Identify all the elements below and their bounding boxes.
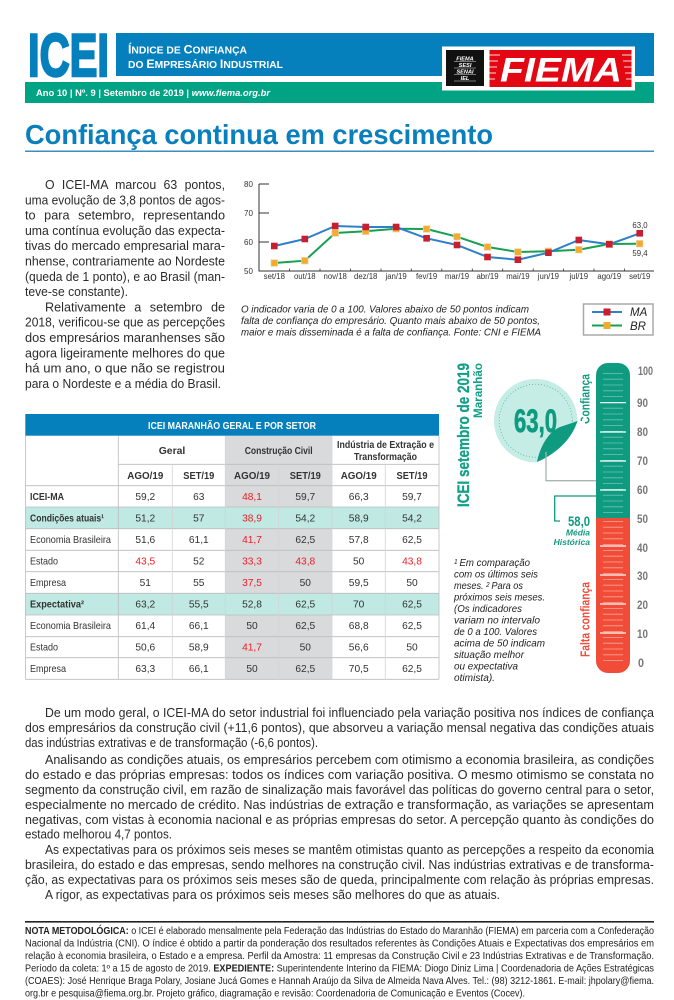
footnote beside gauge: com os últimos seis <box>454 570 538 580</box>
label: Falta confiança: Falta confiança <box>578 581 592 657</box>
methodological note: Período da coleta: 1º a 15 de agosto de 2019. EXPEDIENTE: Superintendente Interino da FIEMA: Diogo Diniz Lima | Coordenadoria de Ações Estratégicas <box>25 964 654 974</box>
period headers: SET/19 <box>183 471 214 482</box>
row: Expectativa: 70 <box>353 600 365 610</box>
row: Empresa: Empresa <box>30 578 66 589</box>
publication name: ÍNDICE DE CONFIANÇA <box>128 42 247 56</box>
end value labels: 63,0 <box>632 221 648 230</box>
row: Estado: 43,5 <box>135 556 156 568</box>
row: Estado (expectativa): 50 <box>406 642 418 654</box>
BR series <box>271 225 643 266</box>
chart caption <box>241 304 541 338</box>
period headers <box>127 471 428 482</box>
axes <box>259 184 654 271</box>
period headers: SET/19 <box>396 471 428 482</box>
MA series <box>271 223 643 263</box>
x axis labels: mai/19 <box>506 272 530 281</box>
row: Empresa (expectativa) <box>30 664 422 675</box>
row: ICEI-MA: 66,3 <box>349 492 369 503</box>
row: Economia Brasileira: 62,5 <box>402 535 422 546</box>
historical average label: 58,0 <box>568 513 590 529</box>
table backgrounds <box>25 414 439 679</box>
row: Estado (expectativa): 41,7 <box>242 642 262 654</box>
chart caption: falta de confiança do empresário. Quanto mais abaixo de 50 pontos, <box>241 316 540 327</box>
row: Economia Brasileira (expectativa): Economia Brasileira <box>30 621 111 632</box>
label: Confiança: Confiança <box>578 373 592 424</box>
row: Economia Brasileira (expectativa): 50 <box>246 621 258 632</box>
scale numbers: 0 <box>638 656 644 670</box>
row: Empresa (expectativa): 62,5 <box>402 664 422 675</box>
row: Empresa (expectativa): 66,1 <box>189 664 209 675</box>
intro text column: agora ligeiramente melhores do que <box>25 346 225 360</box>
row: Expectativa: 62,5 <box>402 600 422 610</box>
row: Empresa (expectativa): Empresa <box>30 664 66 675</box>
footnote beside gauge: situação melhor <box>454 650 525 661</box>
x axis labels: out/18 <box>294 272 316 281</box>
x axis labels: set/19 <box>629 272 650 281</box>
row: Condições atuais: 54,2 <box>402 514 422 524</box>
row: Empresa: 59,5 <box>349 578 369 589</box>
y axis labels: 60 <box>244 238 253 247</box>
body text: do estado e das próprias empresas: todos os índices com variação positiva. O mesmo otimismo se constata no <box>25 768 654 782</box>
footnote beside gauge: acima de 50 indicam <box>454 638 545 650</box>
end value labels: 59,4 <box>632 249 648 258</box>
column group headers: Construção Civil <box>245 446 313 457</box>
row: Estado: 52 <box>193 556 205 568</box>
table: ICEI Maranhão geral e por setor <box>25 414 439 679</box>
scale numbers: 10 <box>637 627 648 641</box>
row: Economia Brasileira <box>30 535 422 546</box>
intro text column: teve-se constante). <box>25 285 128 299</box>
column group headers: Geral <box>159 446 185 457</box>
publication name <box>128 42 283 71</box>
header banner <box>25 22 654 103</box>
period headers: SET/19 <box>290 471 321 482</box>
FIEMA logo <box>442 46 635 90</box>
row: Expectativa: 62,5 <box>295 600 316 610</box>
row: Economia Brasileira (expectativa): 62,5 <box>295 621 316 632</box>
scale numbers: 30 <box>637 569 648 583</box>
row: Estado: 50 <box>353 556 365 568</box>
row: ICEI-MA: 63 <box>193 492 205 503</box>
row: Estado (expectativa): 56,6 <box>349 642 369 654</box>
body text: De um modo geral, o ICEI-MA do setor industrial foi influenciado pela variação positiva nos índices de confiança <box>45 706 654 720</box>
scale numbers: 80 <box>637 425 648 439</box>
scale numbers: 40 <box>637 541 648 555</box>
row: Empresa (expectativa): 62,5 <box>295 664 316 675</box>
row: Economia Brasileira: 57,8 <box>349 535 369 546</box>
footnote beside gauge: próximos seis meses. <box>453 592 545 604</box>
x axis labels: dez/18 <box>354 272 377 281</box>
x axis labels <box>264 272 650 281</box>
footnote beside gauge: (Os indicadores <box>454 604 522 615</box>
column group headers: Indústria de Extração e <box>337 440 434 451</box>
row: Economia Brasileira: 62,5 <box>295 535 316 546</box>
body text: ção, as expectativas para os próximos seis meses são de queda, principalmente com relação às próprias empresas. <box>25 873 654 887</box>
x axis labels: set/18 <box>264 272 285 281</box>
row: ICEI-MA: 59,7 <box>295 492 316 503</box>
chart legend: BR <box>630 321 646 333</box>
body text: dos empresários da construção civil (+11,6 pontos), que absorveu a variação mensal negativa das condições atuais <box>25 721 654 735</box>
intro text column: há um ano, o que não se registrou <box>25 362 225 376</box>
row: Estado (expectativa): Estado <box>30 642 58 654</box>
intro text column: to para setembro, representando <box>25 209 225 223</box>
period headers: AGO/19 <box>341 471 377 482</box>
intro text column: para o Nordeste e a média do Brasil. <box>25 377 221 391</box>
x axis labels: jan/19 <box>384 272 407 281</box>
historical average label: Média <box>566 528 590 538</box>
scale numbers: 70 <box>637 454 648 468</box>
body text <box>25 706 654 902</box>
row: Empresa: 50 <box>406 578 418 589</box>
FIEMA logo: SENAI <box>456 70 474 76</box>
end value labels <box>632 221 648 258</box>
footnote beside gauge: variam no intervalo <box>454 616 540 626</box>
line chart: MA vs BR <box>244 180 654 281</box>
y axis labels: 70 <box>244 209 253 218</box>
period headers: AGO/19 <box>127 471 163 482</box>
intro text column: O ICEI-MA marcou 63 pontos, <box>45 178 225 192</box>
body text: especialmente no mercado de crédito. Nas indústrias de extração e transformação, as variações se apresentam <box>25 798 654 812</box>
column group headers: Transformação <box>354 452 417 463</box>
scale numbers: 50 <box>637 512 648 526</box>
row: Condições atuais: 57 <box>193 514 205 524</box>
row: ICEI-MA: 48,1 <box>242 492 262 503</box>
footnote beside gauge: Para os <box>491 581 523 592</box>
footnote beside gauge <box>453 558 545 684</box>
green segment <box>596 363 630 518</box>
historical average label: Histórica <box>554 537 590 547</box>
row: Expectativa: 55,5 <box>189 600 209 610</box>
row: Empresa: 50 <box>300 578 311 589</box>
row: ICEI-MA: ICEI-MA <box>30 492 64 503</box>
row: Economia Brasileira: 51,6 <box>135 535 156 546</box>
intro text column <box>25 178 225 391</box>
intro text column: nhense, contrariamente ao Nordeste <box>25 254 225 268</box>
table grid <box>26 436 439 679</box>
y axis labels <box>244 180 253 276</box>
row: Expectativa: 52,8 <box>242 600 262 610</box>
row: Economia Brasileira (expectativa): 68,8 <box>349 621 369 632</box>
row: Empresa: 55 <box>193 578 205 589</box>
row: Expectativa <box>30 600 422 610</box>
row: Estado: 43,8 <box>402 556 422 568</box>
FIEMA logo: SESI <box>459 63 472 69</box>
table title bar: ICEI MARANHÃO GERAL E POR SETOR <box>148 419 316 432</box>
footnote beside gauge: Em comparação <box>459 558 530 569</box>
methodological note: org.br e pesquisa@fiema.org.br. Projeto gráfico, diagramação e revisão: Coordenadoria de Comunicação e Eventos (Cocev). <box>25 988 525 1000</box>
intro text column: tivas do mercado empresarial mara- <box>25 239 225 253</box>
value sticker: 63,0: 63,0 <box>514 403 557 439</box>
row: Economia Brasileira: Economia Brasileira <box>30 535 111 546</box>
vertical subheading: Maranhão: Maranhão <box>471 363 485 418</box>
x axis labels: jun/19 <box>537 272 559 281</box>
footnote beside gauge: 1 <box>454 559 459 566</box>
y axis labels: 50 <box>244 267 253 276</box>
main title: Confiança continua em crescimento <box>25 119 493 150</box>
column group headers <box>159 440 434 463</box>
publication name: DO EMPRESÁRIO INDUSTRIAL <box>128 57 283 71</box>
methodological note: Nacional da Indústria (CNI). O índice é obtido a partir da ponderação dos resultados referentes às Condições Atuais e Expectativas dos empresários em <box>25 938 654 950</box>
row: ICEI-MA <box>30 492 422 503</box>
intro text column: uma evolução de 3,8 pontos de agos- <box>25 193 225 207</box>
body text: As expectativas para os próximos seis meses se mantêm otimistas quanto as percepções a respeito da economia <box>45 843 654 857</box>
intro text column: (queda de 1 ponto), e ao Brasil (man- <box>25 270 225 284</box>
row: Empresa: 51 <box>140 578 151 589</box>
row: Empresa <box>30 578 418 589</box>
scale numbers: 60 <box>637 483 648 497</box>
vertical heading: ICEI setembro de 2019: ICEI setembro de 2019 <box>454 363 473 507</box>
chart caption: maior e mais disseminada é a falta de confiança. Fonte: CNI e FIEMA <box>241 328 541 338</box>
scale numbers: 20 <box>637 598 648 612</box>
table title bar <box>25 414 439 436</box>
footnote beside gauge: otimista). <box>454 673 495 684</box>
body text: A rigor, as expectativas para os próximos seis meses são melhores do que as atuais. <box>45 888 500 902</box>
y axis labels: 80 <box>244 180 253 189</box>
methodological note <box>25 921 655 1000</box>
row: ICEI-MA: 59,7 <box>402 492 422 503</box>
intro text column: 2018, verificou-se que as percepções <box>25 316 225 330</box>
x axis labels: jul/19 <box>568 272 588 281</box>
row: Economia Brasileira (expectativa): 66,1 <box>189 621 209 632</box>
blue title band <box>116 33 654 76</box>
connector: current value to gauge <box>546 452 596 481</box>
x axis labels: mar/19 <box>445 272 469 281</box>
x axis labels: fev/19 <box>416 272 437 281</box>
row: Estado (expectativa): 58,9 <box>189 642 209 654</box>
intro text column: dos empresários maranhenses são <box>25 331 225 345</box>
chart legend <box>584 304 653 335</box>
footnote beside gauge: ou expectativa <box>454 662 518 672</box>
row: Condições atuais: Condições atuais¹ <box>30 512 104 524</box>
row: Economia Brasileira (expectativa) <box>30 621 422 632</box>
row: Empresa: 37,5 <box>242 578 262 589</box>
row: Economia Brasileira (expectativa): 62,5 <box>402 621 422 632</box>
footnote beside gauge: de 0 a 100. Valores <box>454 627 537 638</box>
row: Expectativa: Expectativa² <box>30 600 84 610</box>
scale numbers <box>637 364 653 670</box>
value sticker: 63,0 <box>494 379 585 470</box>
scale numbers: 100 <box>638 364 653 378</box>
row: Estado (expectativa) <box>30 642 418 654</box>
body text: estado melhorou 4,7 pontos. <box>25 828 172 842</box>
row: Estado: 33,3 <box>242 556 262 568</box>
body text: negativas, com vistas à economia nacional e as próprias empresas do setor. A percepção quanto às condições do <box>25 813 654 827</box>
gauge thermometer <box>578 363 653 673</box>
row: Condições atuais: 58,9 <box>349 514 369 524</box>
body text: brasileira, do estado e das empresas, sendo melhores na construção civil. Nas indústrias extrativas e de transforma- <box>25 858 654 872</box>
scale numbers: 90 <box>637 396 648 410</box>
row: Estado: 43,8 <box>295 556 316 568</box>
row: ICEI-MA: 59,2 <box>135 492 156 503</box>
row: Economia Brasileira: 41,7 <box>242 535 262 546</box>
row: Estado (expectativa): 50 <box>300 642 311 654</box>
FIEMA logo: FIEMA <box>500 52 622 90</box>
row: Economia Brasileira (expectativa): 61,4 <box>135 621 156 632</box>
ICEI wordmark: ICEI <box>28 22 109 89</box>
row: Condições atuais: 54,2 <box>295 514 316 524</box>
major ticks <box>600 403 626 633</box>
row: Estado (expectativa): 50,6 <box>135 642 156 654</box>
intro text column: uma contínua evolução das expecta- <box>25 224 225 238</box>
row: Condições atuais: 38,9 <box>242 514 262 524</box>
body text: das indústrias extrativas e de transformação (-6,6 pontos). <box>25 736 318 750</box>
red segment <box>596 518 630 673</box>
chart legend: MA <box>630 307 648 319</box>
chart caption: O indicador varia de 0 a 100. Valores abaixo de 50 pontos indicam <box>241 304 529 316</box>
body text: segmento da construção civil, em razão de sinalização mais favorável das políticas do governo central para o setor, <box>25 783 654 797</box>
row: Estado <box>30 556 422 568</box>
x axis labels: ago/19 <box>597 272 621 281</box>
x axis labels: nov/18 <box>323 272 347 281</box>
row: Economia Brasileira: 61,1 <box>189 535 209 546</box>
edition text: Ano 10 | Nº. 9 | Setembro de 2019 | www.fiema.org.br <box>36 88 271 99</box>
row: Condições atuais: 51,2 <box>135 514 156 524</box>
FIEMA logo: FIEMA <box>456 56 474 62</box>
footnote beside gauge: 2 <box>485 582 491 589</box>
body text: Analisando as condições atuais, os empresários percebem com otimismo a economia brasileira, as condições <box>45 753 654 767</box>
period headers: AGO/19 <box>234 471 270 482</box>
FIEMA logo: IEL <box>461 76 470 82</box>
row: Empresa (expectativa): 70,5 <box>349 664 369 675</box>
intro text column: Relativamente a setembro de <box>45 300 225 314</box>
row: Condições atuais <box>30 512 422 524</box>
row: Empresa (expectativa): 63,3 <box>135 664 156 675</box>
green edition band <box>25 82 654 103</box>
connector: historical average to gauge <box>555 496 596 521</box>
minor ticks <box>603 373 623 516</box>
historical average label <box>554 513 590 547</box>
footnote beside gauge: meses. <box>454 581 488 592</box>
methodological note: relação à economia brasileira, o Estado e a empresa. Perfil da Amostra: 11 empresas da Construção Civil e 23 Indústrias Extrativas e de Transformação. <box>25 951 654 962</box>
row: Empresa (expectativa): 50 <box>246 664 258 675</box>
x axis labels: abr/19 <box>476 272 499 281</box>
row: Estado: Estado <box>30 556 58 568</box>
row: Expectativa: 63,2 <box>135 600 156 610</box>
